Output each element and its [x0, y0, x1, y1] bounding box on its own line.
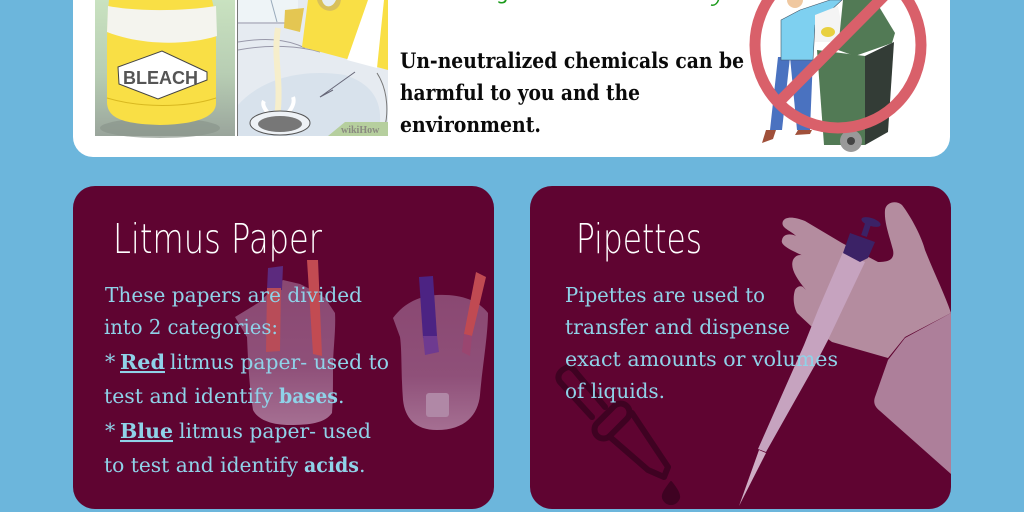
cropped green heading end — [711, 0, 719, 5]
litmus description text: These papers are divided — [105, 283, 362, 307]
card background — [530, 186, 951, 509]
litmus description text: test and identify — [104, 384, 273, 408]
heading: Pipettes: Pipettes — [576, 215, 702, 263]
litmus description text: . — [359, 453, 366, 477]
image: litmus beakers — [235, 260, 488, 430]
litmus description text: to test and identify — [104, 453, 298, 477]
card background — [73, 186, 494, 509]
litmus description text: bases — [279, 384, 338, 408]
panel: disposal warning — [73, 0, 950, 157]
panel: pipettes — [530, 186, 951, 509]
image: pouring into sink — [235, 0, 388, 136]
litmus description text: into 2 categories: — [104, 315, 278, 339]
pipettes description text: transfer and dispense — [565, 315, 790, 339]
pipettes description text: exact amounts or volumes — [565, 347, 838, 371]
image: gloved hand with pipette — [739, 202, 951, 506]
image: bleach bottle — [95, 0, 235, 138]
warning text: environment. — [400, 113, 541, 138]
litmus description text: Red — [120, 350, 165, 374]
pipettes description text: of liquids. — [565, 379, 665, 403]
litmus description text: * — [105, 350, 115, 374]
warning text: Un-neutralized chemicals can be — [400, 49, 744, 74]
pipettes description text — [565, 283, 838, 403]
litmus description text: acids — [304, 453, 359, 477]
warning text — [400, 49, 744, 138]
litmus description text — [104, 283, 389, 477]
litmus description text: litmus paper- used — [179, 419, 371, 443]
icon: no dumping in trash — [755, 0, 921, 152]
warning text: harmful to you and the — [400, 81, 640, 106]
litmus description text: . — [338, 384, 345, 408]
litmus description text: Blue — [120, 419, 173, 443]
wikiHow badge: wikiHow — [341, 125, 380, 136]
panel background — [73, 0, 950, 157]
panel: litmus paper — [73, 186, 494, 509]
pipettes description text: Pipettes are used to — [565, 283, 765, 307]
litmus description text: * — [105, 419, 115, 443]
litmus description text: litmus paper- used to — [170, 350, 389, 374]
bottle label: BLEACH — [123, 68, 198, 88]
icon: dropper — [558, 367, 679, 504]
heading: Litmus Paper: Litmus Paper — [113, 215, 322, 263]
